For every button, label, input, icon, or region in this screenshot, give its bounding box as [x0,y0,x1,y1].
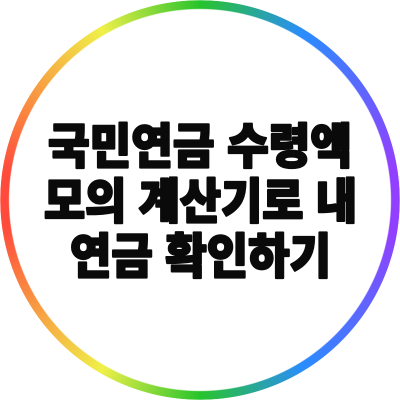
title line 3: 연금 확인하기 [70,231,331,284]
title line 1: 국민연금 수령액 [48,121,352,174]
title line 2: 모의 계산기로 내 [44,176,357,229]
